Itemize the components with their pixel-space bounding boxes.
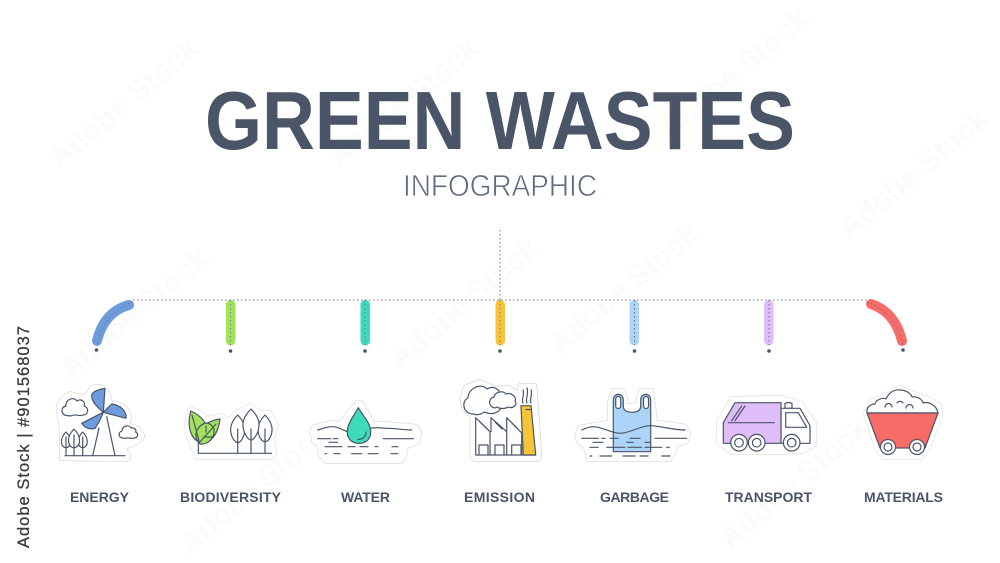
icon: factory with clouds <box>462 381 540 460</box>
marker: energy arc <box>95 302 133 352</box>
watermark: faint stock marks: Adobe Stock <box>43 32 205 175</box>
icon: wind turbine <box>58 386 143 460</box>
label: garbage: GARBAGE <box>600 489 669 505</box>
connector lines <box>133 230 867 300</box>
credit: stock id: Adobe Stock | #901568037 <box>15 326 33 548</box>
watermark: faint stock marks: Adobe Stock <box>173 417 335 560</box>
watermark: faint stock marks: Adobe Stock <box>833 102 995 245</box>
label: transport: TRANSPORT <box>725 489 812 505</box>
icon: garbage truck <box>718 397 815 453</box>
label: biodiversity: BIODIVERSITY <box>180 489 282 505</box>
label: water: WATER <box>341 489 390 505</box>
icon: mine cart <box>865 387 941 458</box>
label: emission: EMISSION <box>464 489 535 505</box>
watermark: faint stock marks: Adobe Stock <box>323 32 485 175</box>
watermark: faint stock marks: Adobe Stock <box>543 217 705 360</box>
marker: transport <box>764 300 774 353</box>
label: materials: MATERIALS <box>864 489 943 505</box>
subtitle: INFOGRAPHIC <box>403 168 597 203</box>
icon: water drop <box>312 402 420 462</box>
watermark: faint stock marks: Adobe Stock <box>713 412 875 555</box>
marker: biodiversity <box>226 300 236 353</box>
watermark: faint stock marks: Adobe Stock <box>53 242 215 385</box>
marker: emission <box>496 300 505 353</box>
icon: leaves and trees <box>186 405 277 458</box>
watermark: faint stock marks: Adobe Stock <box>653 2 815 145</box>
marker: water <box>360 300 370 353</box>
label: energy: ENERGY <box>70 489 130 505</box>
marker: garbage <box>630 300 639 353</box>
icon: plastic bag in water <box>576 390 689 460</box>
marker: materials arc <box>867 302 905 352</box>
title: GREEN WASTES <box>205 74 795 167</box>
watermark: faint stock marks: Adobe Stock <box>383 232 545 375</box>
